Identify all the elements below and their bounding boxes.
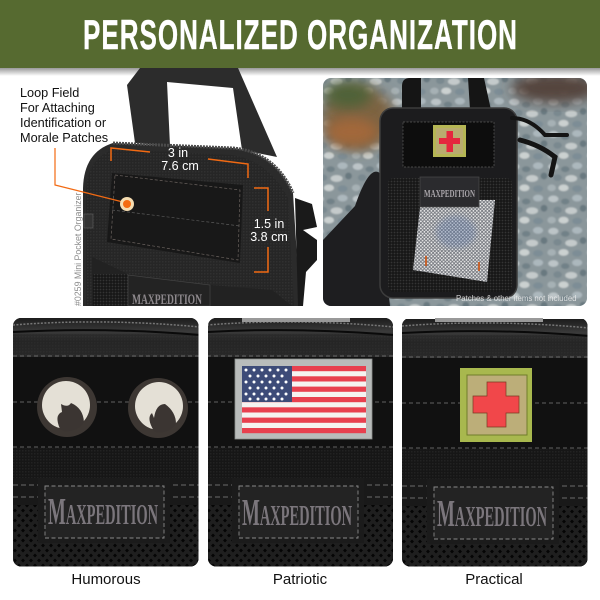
photo: pouch held over gravel — [318, 73, 599, 311]
handles — [402, 78, 491, 110]
eye patch left — [37, 377, 97, 437]
gloved hand — [323, 172, 390, 306]
height label: 1.5 in — [254, 217, 284, 231]
front pocket — [92, 257, 292, 306]
zipper cords — [512, 118, 567, 175]
disclaimer: Patches & other items not included — [456, 294, 576, 303]
handle strap — [127, 68, 277, 157]
callout: loop field description: Identification or — [20, 116, 107, 130]
caption: practical: Practical — [465, 571, 523, 588]
brand label — [128, 275, 210, 306]
pouch label: MAXPEDITION — [424, 189, 475, 200]
title: PERSONALIZED ORGANIZATION — [83, 12, 517, 59]
photo: pouch loop field close-up with dimensions — [55, 68, 317, 308]
product code: #0259 Mini Pocket Organizer — [73, 192, 83, 306]
mesh pocket — [388, 178, 512, 292]
callout: loop field description: Loop Field — [20, 86, 79, 100]
width label: 3 in — [168, 146, 188, 160]
pouch label — [420, 177, 479, 207]
pouch body — [83, 143, 300, 306]
velcro strip — [403, 122, 494, 167]
height label — [250, 218, 287, 241]
width label — [162, 148, 198, 170]
medical cross patch — [460, 368, 532, 442]
callout: loop field description: For Attaching — [20, 101, 95, 115]
photo: pouch loop field close-up with dimensions: MAXPEDITION — [132, 292, 202, 308]
flag patch — [235, 359, 372, 439]
callout: loop field description: Morale Patches — [20, 131, 108, 145]
panel: humorous patch — [13, 318, 200, 567]
leader line and marker — [55, 148, 134, 211]
height label: 3.8 cm — [250, 230, 288, 244]
brand label: MAXPEDITION — [242, 492, 352, 534]
brand label: MAXPEDITION — [48, 491, 158, 533]
velcro loop field — [107, 173, 243, 263]
side buckle — [295, 198, 317, 306]
width label: 7.6 cm — [161, 159, 199, 173]
pouch — [380, 108, 517, 298]
caption: patriotic: Patriotic — [273, 571, 328, 588]
header banner — [0, 0, 600, 76]
caption: humorous: Humorous — [71, 571, 141, 588]
eye patch right — [128, 378, 188, 438]
callout: loop field description — [20, 86, 108, 145]
panel: practical patch — [402, 318, 589, 568]
card behind mesh — [413, 200, 495, 282]
medical patch — [433, 125, 466, 157]
panel: patriotic patch — [207, 318, 394, 567]
width dimension bracket — [111, 148, 248, 178]
height dimension bracket — [254, 188, 268, 272]
